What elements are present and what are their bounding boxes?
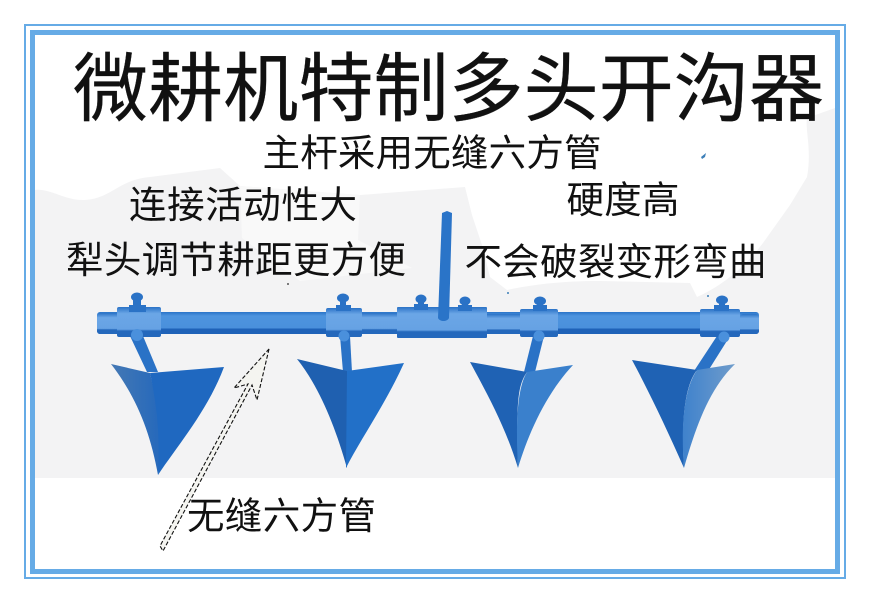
specks (287, 153, 709, 297)
plough share 3 (470, 362, 573, 468)
text: no cracking: 不会破裂变形弯曲 (464, 241, 766, 283)
plough share 1 (111, 364, 224, 475)
plough share 4 (632, 360, 735, 468)
text: seamless hex tube label: 无缝六方管 (187, 495, 376, 537)
bolts (129, 292, 729, 312)
dashed arrow pointing to tube (160, 349, 269, 551)
furrow opener implement (97, 211, 759, 475)
lower knobs (131, 329, 730, 342)
text: connection flexibility: 连接活动性大 (129, 184, 357, 226)
collars (117, 307, 740, 338)
tube end segments (97, 313, 759, 334)
upright handle (438, 211, 452, 321)
text: hardness: 硬度高 (566, 179, 680, 221)
plough share 2 (297, 359, 404, 468)
shank arms (130, 336, 730, 372)
text: main rod: 主杆采用无缝六方管 (262, 132, 602, 174)
main hexagonal tube (97, 312, 759, 334)
background photo area (35, 108, 835, 478)
title: 微耕机特制多头开沟器 (73, 47, 824, 131)
text: adjustable spacing: 犁头调节耕距更方便 (66, 239, 406, 281)
